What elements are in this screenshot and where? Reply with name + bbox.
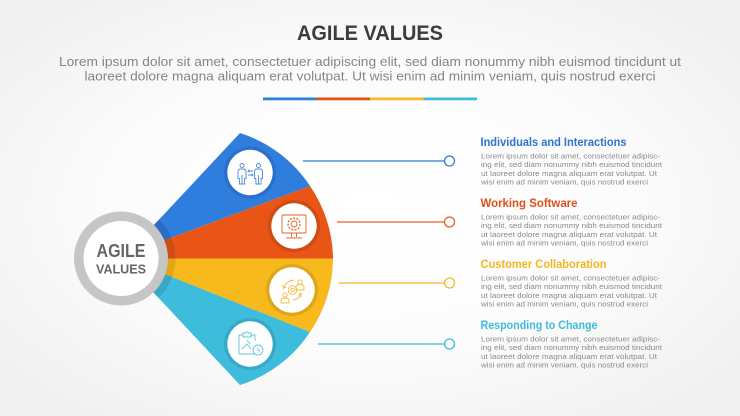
text block: Individuals and Interactions: ing elit, sed diam nonummy nibh euismod tincidunt	[481, 160, 663, 169]
text block: Customer Collaboration: ut laoreet dolore magna aliquam erat volutpat. Ut	[481, 291, 658, 300]
text block: Customer Collaboration: Lorem ipsum dolor sit amet, consectetuer adipisc-	[481, 274, 660, 282]
fan diagram	[74, 133, 333, 385]
text block: Responding to Change: Responding to Change	[480, 318, 598, 332]
connector: collaboration	[339, 278, 454, 288]
text block: Individuals and Interactions: Lorem ipsum dolor sit amet, consectetuer adipisc-	[481, 152, 660, 160]
icon: clipboard clock	[224, 318, 276, 370]
segment: blue	[121, 133, 310, 258]
text block: Working Software: Lorem ipsum dolor sit amet, consectetuer adipisc-	[481, 212, 660, 222]
segment: cyan	[121, 258, 310, 385]
text block: Customer Collaboration: ing elit, sed diam nonummy nibh euismod tincidunt	[481, 282, 663, 291]
text block: Customer Collaboration: Customer Collaboration	[480, 257, 606, 271]
hub circle	[74, 212, 168, 306]
text block: Responding to Change: ut laoreet dolore magna aliquam erat volutpat. Ut	[481, 352, 658, 361]
title: AGILE VALUES	[297, 22, 443, 45]
title divider bar	[263, 98, 477, 100]
hub circle: VALUES	[96, 261, 146, 276]
segment: yellow	[121, 258, 333, 332]
connector: individuals	[303, 156, 454, 166]
icon: customer money cycle	[266, 264, 318, 316]
hub shadow band	[154, 220, 176, 298]
segment: orange	[121, 186, 333, 258]
text block: Responding to Change: Lorem ipsum dolor sit amet, consectetuer adipisc-	[481, 334, 660, 344]
connector: change	[318, 339, 454, 349]
subtitle text: laoreet dolore magna aliquam erat volutpat. Ut wisi enim ad minim veniam, quis nostrud exerci	[84, 70, 656, 84]
text block: Working Software: wisi enim ad minim veniam, quis nostrud exerci	[480, 238, 648, 248]
subtitle text	[59, 55, 682, 84]
text block: Individuals and Interactions: ut laoreet dolore magna aliquam erat volutpat. Ut	[481, 169, 658, 178]
hub circle: AGILE	[96, 241, 146, 261]
text block: Working Software: ut laoreet dolore magna aliquam erat volutpat. Ut	[481, 230, 658, 239]
text block: Working Software: Working Software	[480, 196, 578, 210]
text block: Responding to Change	[480, 318, 663, 370]
icon: people exchange	[224, 146, 276, 198]
icon: monitor gear	[268, 200, 320, 252]
text block: Individuals and Interactions	[480, 135, 663, 186]
connector: software	[337, 217, 454, 227]
text block: Individuals and Interactions: Individuals and Interactions	[480, 135, 627, 149]
text block: Working Software: ing elit, sed diam nonummy nibh euismod tincidunt	[481, 221, 663, 230]
text block: Customer Collaboration	[480, 257, 663, 308]
text block: Customer Collaboration: wisi enim ad minim veniam, quis nostrud exerci	[480, 300, 648, 308]
text block: Responding to Change: wisi enim ad minim veniam, quis nostrud exerci	[480, 360, 648, 370]
text block: Responding to Change: ing elit, sed diam nonummy nibh euismod tincidunt	[481, 343, 663, 352]
text block: Working Software	[480, 196, 663, 248]
subtitle text: Lorem ipsum dolor sit amet, consectetuer adipiscing elit, sed diam nonummy nibh euismod tincidunt ut	[59, 55, 682, 69]
text block: Individuals and Interactions: wisi enim ad minim veniam, quis nostrud exerci	[480, 178, 648, 186]
